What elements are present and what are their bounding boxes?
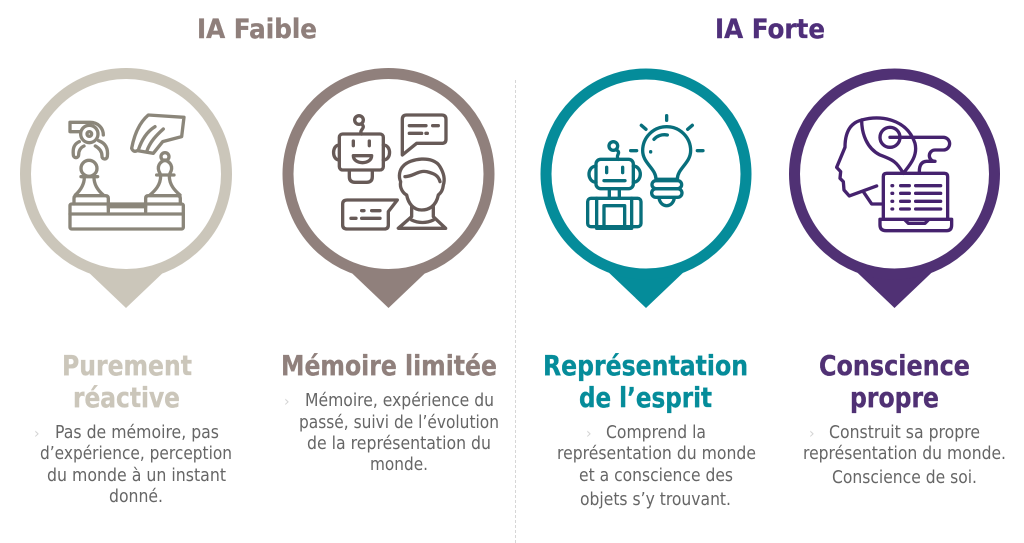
panel: Conscience propre title: propre [850, 382, 939, 414]
icon: human head with circuit and laptop [837, 118, 952, 231]
text block: Conscience propre description: Construit sa propre [829, 423, 980, 443]
icon: robot and human playing chess [70, 115, 184, 229]
text block: Représentation de l'esprit description: › [586, 426, 592, 442]
panel: Conscience propre title [819, 350, 970, 414]
panel: Conscience propre pin [794, 74, 994, 308]
text block: Purement réactive description [34, 423, 232, 507]
panel: Purement réactive title: Purement [62, 350, 192, 382]
pin marker ring [794, 74, 994, 308]
panel: Purement réactive pin [26, 74, 226, 308]
text block: Purement réactive description: Pas de mémoire, pas [55, 423, 219, 443]
panel: Mémoire limitée pin [288, 74, 489, 308]
text block: Purement réactive description: d’expérience, perception [40, 444, 232, 464]
panel: Représentation de l'esprit pin [546, 74, 746, 308]
text block: Mémoire limitée description: de la représentation du [307, 434, 491, 454]
panel: Représentation de l'esprit title: Représentation [543, 350, 748, 382]
text block: Représentation de l'esprit description: et a conscience des [579, 466, 733, 486]
text block: Conscience propre description: Conscience de soi. [832, 468, 977, 488]
pin marker ring [546, 74, 746, 308]
heading: IA Forte: IA Forte [715, 14, 825, 45]
panel: Représentation de l'esprit title [543, 350, 748, 414]
text block: Représentation de l'esprit description: représentation du monde [557, 444, 756, 464]
heading: IA Faible: IA Faible [197, 14, 317, 45]
panel: Conscience propre title: Conscience [819, 350, 970, 382]
text block: Conscience propre description: › [809, 426, 815, 442]
panel: Représentation de l'esprit title: de l’esprit [579, 382, 712, 414]
text block: Purement réactive description: › [34, 426, 40, 442]
panel: Mémoire limitée title: Mémoire limitée [281, 350, 497, 382]
text block: Mémoire limitée description: › [284, 394, 290, 410]
text block: Purement réactive description: donné. [109, 487, 163, 507]
text block: Mémoire limitée description: passé, suivi de l’évolution [299, 413, 499, 433]
pin marker ring [26, 74, 226, 308]
pin marker ring [288, 74, 489, 308]
text block: Mémoire limitée description [284, 391, 499, 475]
text block: Représentation de l'esprit description [557, 423, 756, 510]
text block: Mémoire limitée description: Mémoire, expérience du [305, 391, 494, 411]
divider between IA Faible and IA Forte [514, 80, 516, 543]
text block: Purement réactive description: du monde à un instant [47, 466, 226, 486]
text block: Mémoire limitée description: monde. [370, 455, 428, 475]
text block: Représentation de l'esprit description: Comprend la [606, 423, 706, 443]
panel: Purement réactive title [62, 350, 192, 414]
text block: Représentation de l'esprit description: objets s’y trouvant. [580, 490, 731, 510]
icon: robot and man in conversation [334, 115, 446, 229]
text block: Conscience propre description [803, 423, 1006, 488]
icon: robot and light bulb [588, 116, 703, 228]
panel: Purement réactive title: réactive [73, 382, 180, 414]
